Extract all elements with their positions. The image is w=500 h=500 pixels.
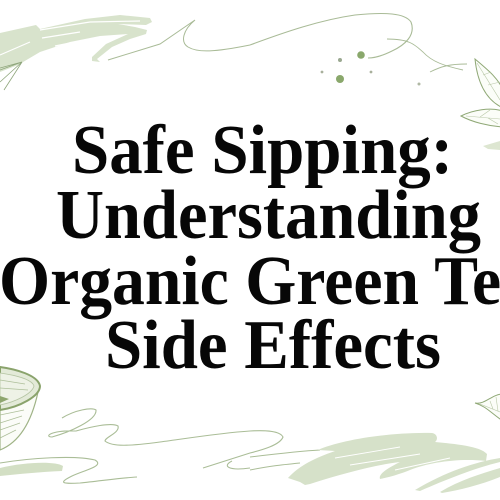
dots: top centre xyxy=(321,51,420,86)
icon: tea bowl xyxy=(0,367,40,450)
squiggle line: bottom centre xyxy=(227,450,320,470)
brush smudge: right xyxy=(483,141,500,150)
brush stroke: bottom right xyxy=(288,433,500,493)
brush stroke: top left xyxy=(0,15,152,72)
leaf stem: top left xyxy=(0,62,22,90)
tendril: top right xyxy=(387,39,467,72)
title: Safe Sipping: xyxy=(72,112,453,189)
title: Side Effects xyxy=(105,307,441,384)
title: Understanding xyxy=(56,177,481,254)
squiggle line: top xyxy=(108,13,412,60)
leaves: top right xyxy=(461,59,500,127)
squiggle line: bottom left xyxy=(0,409,283,483)
brush stroke: bottom left xyxy=(0,463,63,476)
title xyxy=(0,112,500,384)
leaf: bottom right xyxy=(475,394,500,421)
